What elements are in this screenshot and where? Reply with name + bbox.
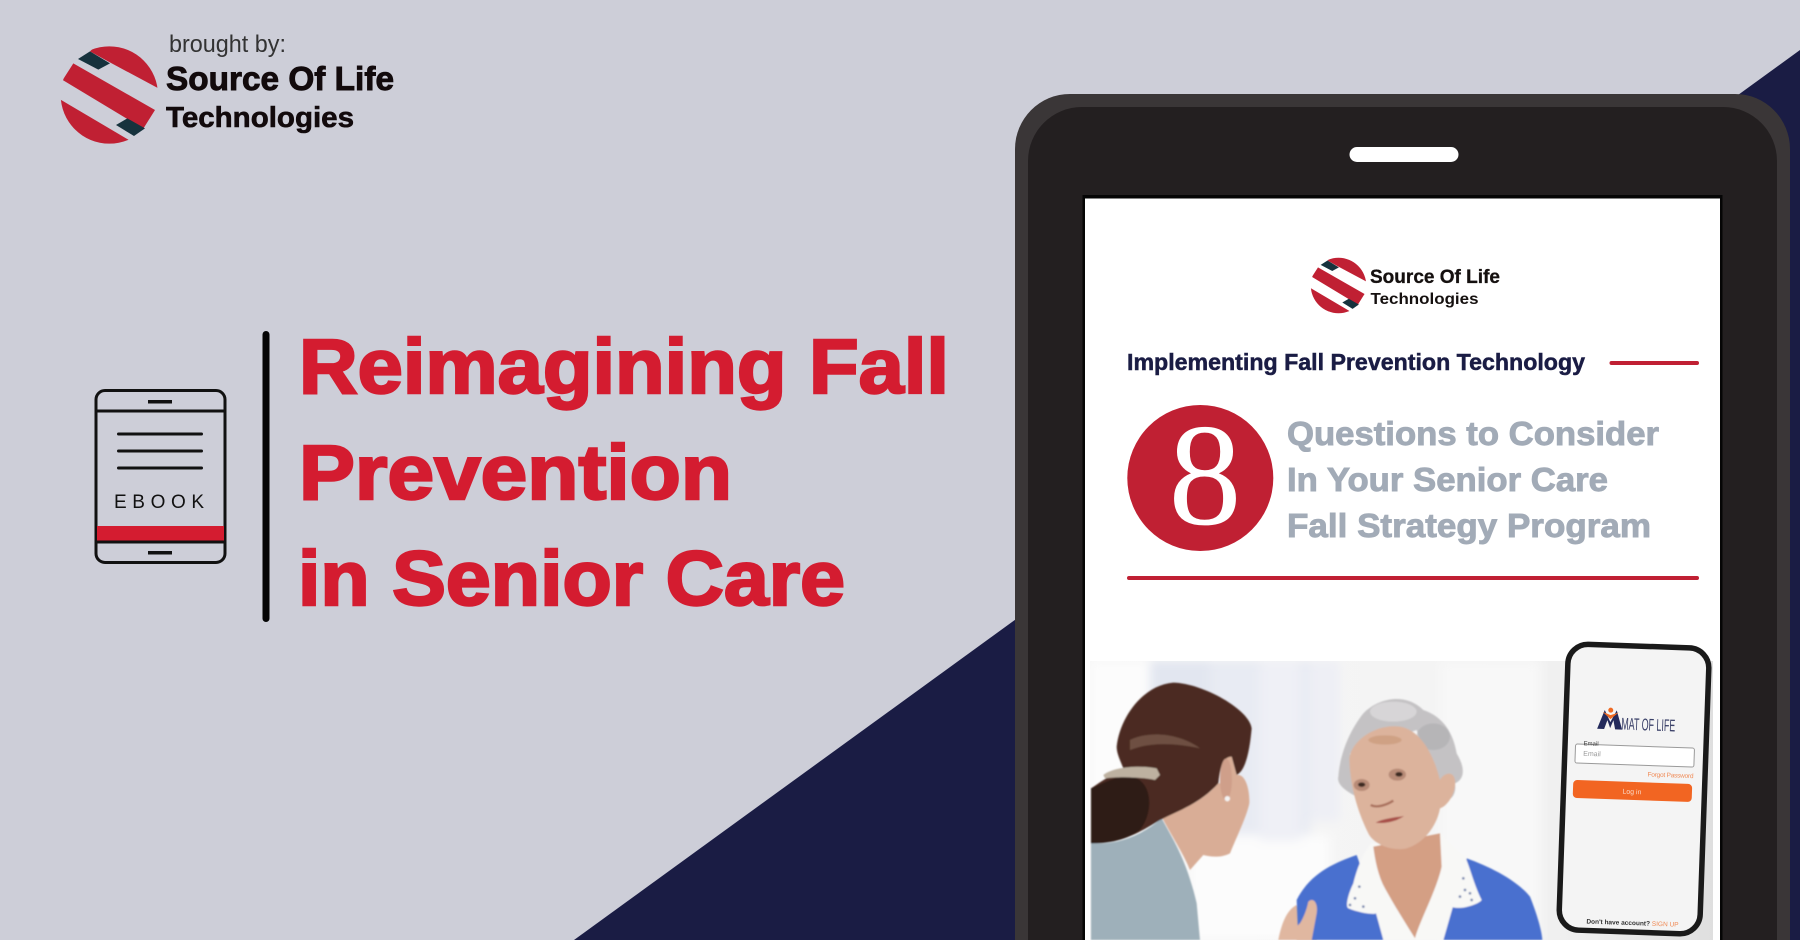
log in button xyxy=(1573,780,1692,802)
tablet outer bezel xyxy=(1015,94,1790,940)
heading: implementing fall prevention technology: Implementing Fall Prevention Technology xyxy=(1127,349,1585,375)
elderly woman figure xyxy=(1297,699,1542,940)
email input xyxy=(1575,741,1695,767)
brand logo: top left xyxy=(60,34,394,144)
number badge 8 xyxy=(1127,394,1273,556)
text: brought by: brought by: xyxy=(169,31,286,58)
title xyxy=(298,324,949,622)
subheading: questions: In Your Senior Care xyxy=(1287,461,1608,498)
text: EBOOK: EBOOK xyxy=(114,492,204,513)
subheading: questions xyxy=(1287,415,1659,544)
navy diagonal shape xyxy=(574,50,1800,940)
email input: Email xyxy=(1583,741,1599,748)
icon: Source Of Life logo mark xyxy=(60,46,158,144)
text: Technologies: Technologies xyxy=(166,102,354,134)
subheading: questions: Fall Strategy Program xyxy=(1287,507,1651,544)
red rule short xyxy=(1610,361,1699,365)
mat of life app logo: MAT OF LIFE xyxy=(1621,715,1676,735)
text: cover Source Of Life: Source Of Life xyxy=(1370,267,1500,288)
tablet inner body xyxy=(1028,107,1777,940)
forgot password link: Forgot Password xyxy=(1647,772,1694,780)
icon: cover logo mark xyxy=(1310,258,1366,314)
mat of life app logo xyxy=(1597,707,1676,735)
red rule long xyxy=(1127,576,1699,580)
text: Source Of Life: Source Of Life xyxy=(166,60,394,97)
email input: Email xyxy=(1583,751,1601,758)
title: Reimagining Fall xyxy=(299,324,949,410)
log in button: Log in xyxy=(1622,789,1642,796)
text: cover Technologies: Technologies xyxy=(1370,291,1479,308)
tablet speaker xyxy=(1350,147,1458,162)
icon: ebook tablet xyxy=(96,390,225,562)
title: in Senior Care xyxy=(298,536,845,622)
cover logo xyxy=(1307,256,1500,317)
panel: ebook cover page xyxy=(1085,198,1720,940)
screen border xyxy=(1082,195,1722,940)
sign up prompt: Don't have account? SIGN UP xyxy=(1586,918,1679,929)
carer figure xyxy=(1091,683,1318,940)
phone body xyxy=(1559,644,1709,934)
device: large tablet xyxy=(1015,94,1790,940)
app phone mockup xyxy=(1559,644,1709,934)
number badge 8: 8 xyxy=(1168,394,1242,556)
vertical divider bar xyxy=(262,331,270,622)
subheading: questions: Questions to Consider xyxy=(1287,415,1659,452)
title: Prevention xyxy=(299,430,732,516)
photo: carer and elderly woman xyxy=(1090,661,1713,940)
